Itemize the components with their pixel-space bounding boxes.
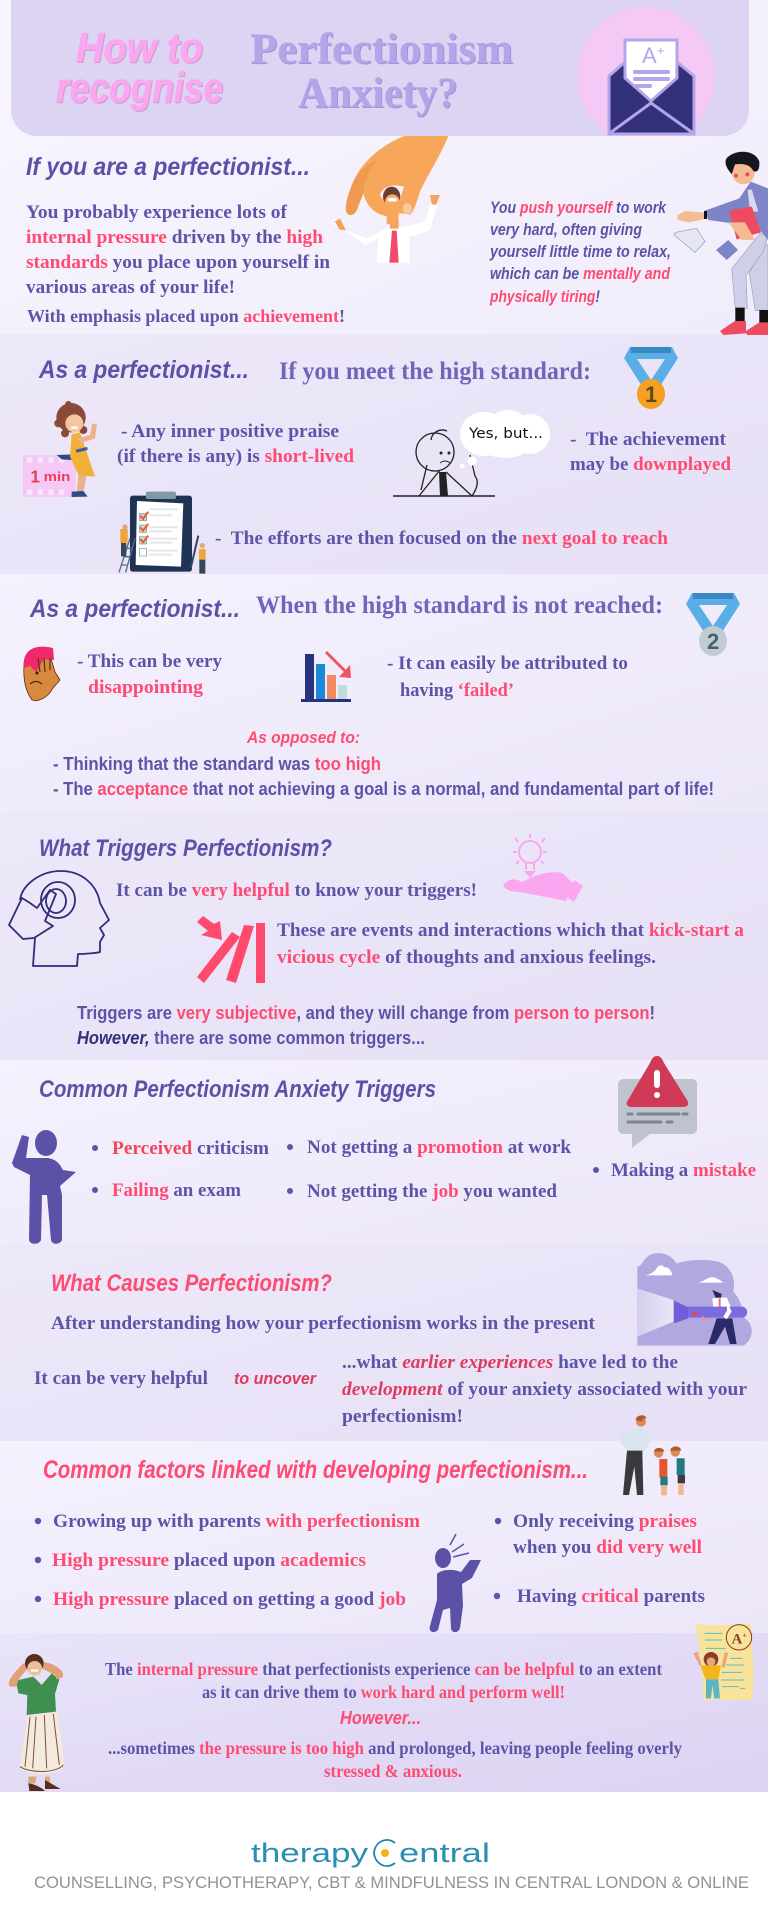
bullet list: left: Growing up with parents with perfectionism: [53, 1512, 421, 1532]
icon: stressed man dropping papers: [674, 152, 768, 335]
heading: Common Perfectionism Anxiety Triggers: [39, 1076, 436, 1103]
panel: common perfectionism anxiety triggers: [12, 1056, 756, 1244]
text block: push yourself: very hard, often giving: [490, 220, 643, 239]
text block: internal pressure: standards you place upon yourself in: [26, 253, 331, 273]
icon: envelope with A+ paper: +: [657, 43, 665, 58]
text block: pressure too high: stressed & anxious.: [324, 1761, 462, 1781]
text block: downplayed: - The achievement: [570, 430, 727, 450]
icon: silver medal: 2: [707, 629, 719, 654]
text block: push yourself: which can be mentally and: [490, 264, 671, 283]
bullet list: left: High pressure placed on getting a good job: [53, 1590, 406, 1610]
text block: opposed list: [53, 754, 714, 799]
text block: disappointing: - This can be very: [77, 652, 223, 672]
title: how to recognise: [56, 24, 223, 111]
text block: internal pressure: With emphasis placed upon achievement!: [27, 306, 345, 326]
footer: tagline: COUNSELLING, PSYCHOTHERAPY, CBT & MINDFULNESS IN CENTRAL LONDON & ONLINE: [34, 1873, 749, 1892]
text block: next goal: - The efforts are then focused on the next goal to reach: [215, 529, 669, 549]
heading: What Causes Perfectionism?: [51, 1270, 332, 1297]
text block: push yourself: [489, 198, 671, 306]
subheading: however: However...: [340, 1708, 421, 1728]
title: how to recognise: How to: [76, 24, 203, 71]
footer: therapy central logo: [251, 1838, 490, 1868]
panel: what triggers perfectionism: [9, 834, 744, 1048]
subheading: as opposed to: As opposed to:: [246, 728, 360, 747]
text block: failed: having ‘failed’: [400, 681, 514, 701]
panel: common factors background: [0, 1441, 768, 1633]
icon: clipboard checklist: [119, 492, 206, 574]
text block: pressure too high: [108, 1738, 682, 1781]
text block: failed: - It can easily be attributed to: [387, 654, 628, 674]
icon: anxious woman holding head: [9, 1654, 64, 1791]
text block: opposed list: - Thinking that the standard was too high: [53, 754, 381, 774]
icon: falling bar chart: [301, 652, 351, 702]
text block: disappointing: [77, 652, 223, 698]
text block: to uncover: to uncover: [234, 1369, 317, 1388]
icon: girl on one minute film: [23, 401, 97, 497]
panel: footer background: [0, 1792, 768, 1920]
icon: A plus paper with happy girl: [693, 1623, 754, 1700]
callout: yes but thought cloud: [460, 410, 550, 468]
heading: as a perfectionist: As a perfectionist...: [38, 356, 249, 384]
panel: if you meet the high standard: [23, 347, 732, 574]
icon: A plus paper with happy girl: +: [742, 1630, 747, 1639]
callout: yes but thought cloud: Yes, but...: [468, 426, 543, 442]
icon: disappointed face: [24, 647, 60, 700]
text block: internal pressure: various areas of your life!: [26, 278, 235, 298]
heading: not reached: When the high standard is not reached:: [256, 592, 663, 619]
text block: after understanding: After understanding how your perfectionism works in the present: [51, 1314, 596, 1334]
icon: father and two sons: [620, 1415, 685, 1495]
bullet list: right: [494, 1512, 705, 1607]
icon: hand pinching man: [334, 136, 448, 263]
text block: push yourself: You push yourself to work: [490, 198, 667, 217]
icon: head with finger press: [9, 871, 109, 966]
text block: internal pressure helpful: as it can drive them to work hard and perform well!: [202, 1682, 565, 1702]
text block: downplayed: may be downplayed: [570, 455, 732, 475]
icon: gold medal: [624, 347, 678, 409]
text block: internal pressure helpful: [105, 1659, 662, 1702]
icon: warning message: [618, 1056, 697, 1148]
panel: when the high standard is not reached: [24, 592, 740, 799]
bullet list: column two: Not getting the job you wanted: [307, 1182, 558, 1202]
panel: common factors linked: [35, 1415, 705, 1632]
icon: falling dominoes: [197, 916, 265, 983]
title: perfectionism anxiety: Anxiety?: [298, 70, 458, 117]
text block: internal pressure: [26, 203, 345, 326]
bullet list: column two: Not getting a promotion at work: [307, 1138, 572, 1158]
text block: internal pressure: You probably experience lots of: [26, 203, 288, 223]
text block: subjective triggers: Triggers are very subjective, and they will change from person to person!: [77, 1003, 655, 1023]
icon: confused man: [12, 1130, 76, 1244]
text block: it can be very helpful: It can be very helpful: [34, 1369, 208, 1389]
icon: envelope with A+ paper: A: [642, 43, 657, 68]
panel: intro background: [0, 0, 768, 334]
heading: meet the high standard: If you meet the high standard:: [279, 358, 591, 385]
text block: helpful to know: It can be very helpful to know your triggers!: [116, 881, 477, 901]
text block: subjective triggers: However, there are some common triggers...: [77, 1028, 425, 1048]
text block: earlier experiences: ...what earlier experiences have led to the: [342, 1353, 678, 1373]
icon: girl on one minute film: min: [44, 470, 70, 484]
icon: shouting man: [430, 1534, 481, 1632]
bullet list: column one: Perceived criticism: [112, 1139, 270, 1159]
bullet list: column two: [287, 1138, 572, 1202]
panel: causes background: [0, 1244, 768, 1441]
panel: header banner: [11, 0, 749, 145]
icon: A plus paper with happy girl: A: [732, 1631, 743, 1647]
icon: bulb over hand: [503, 834, 583, 902]
text block: internal pressure helpful: The internal pressure that perfectionists experience can be helpful to an extent: [105, 1659, 662, 1679]
footer: therapy central logo: entral: [399, 1838, 490, 1868]
text block: pressure too high: ...sometimes the pressure is too high and prolonged, leaving people feeling overly: [108, 1738, 682, 1758]
bullet list: right: when you did very well: [513, 1538, 702, 1558]
bullet list: right: Only receiving praises: [513, 1512, 697, 1532]
text block: earlier experiences: [342, 1353, 747, 1427]
bullet list: column one: [92, 1139, 270, 1201]
panel: conclusion: [9, 1623, 754, 1791]
text block: short-lived praise: [117, 422, 355, 467]
icon: stick man thinking: [393, 430, 495, 496]
heading: If you are a perfectionist...: [26, 153, 310, 181]
text block: internal pressure: internal pressure driven by the high: [26, 228, 324, 248]
icon: envelope with A+ paper: [577, 7, 715, 145]
text block: vicious cycle: [277, 921, 744, 968]
bullet: making a mistake: Making a mistake: [611, 1161, 756, 1181]
panel: not reached background: [0, 574, 768, 812]
bullet list: left: High pressure placed upon academics: [52, 1551, 366, 1571]
icon: gold medal: 1: [645, 382, 657, 407]
heading: as a perfectionist: As a perfectionist...: [29, 595, 240, 623]
bullet list: right: Having critical parents: [517, 1587, 705, 1607]
panel: if you are a perfectionist: [26, 136, 768, 335]
bullet list: column one: Failing an exam: [112, 1181, 242, 1201]
text block: vicious cycle: vicious cycle of thoughts and anxious feelings.: [277, 948, 656, 968]
text block: short-lived praise: - Any inner positive praise: [121, 422, 339, 442]
title: perfectionism anxiety: [250, 26, 513, 117]
icon: girl on one minute film: 1: [30, 466, 40, 486]
panel: met standard background: [0, 334, 768, 574]
text block: disappointing: disappointing: [88, 678, 204, 698]
panel: conclusion background: [0, 1633, 768, 1792]
text block: earlier experiences: perfectionism!: [342, 1407, 463, 1427]
text block: earlier experiences: development of your anxiety associated with your: [342, 1380, 747, 1400]
text block: vicious cycle: These are events and interactions which that kick-start a: [277, 921, 744, 941]
heading: What Triggers Perfectionism?: [39, 835, 332, 862]
bullet list: left: [35, 1512, 421, 1610]
icon: man with flashlight: [637, 1253, 752, 1346]
panel: triggers background: [0, 812, 768, 1060]
text block: opposed list: - The acceptance that not achieving a goal is a normal, and fundamental part of life!: [53, 779, 714, 799]
icon: silver medal: [686, 593, 740, 656]
text block: short-lived praise: (if there is any) is short-lived: [117, 447, 355, 467]
text block: subjective triggers: [77, 1003, 655, 1048]
text block: downplayed: [570, 430, 732, 475]
title: perfectionism anxiety: Perfectionism: [250, 26, 513, 73]
footer: therapy central logo: therapy: [251, 1838, 369, 1868]
text block: push yourself: physically tiring!: [489, 287, 600, 306]
panel: common triggers background: [0, 1060, 768, 1244]
heading: Common factors linked with developing perfectionism...: [43, 1456, 588, 1484]
text block: failed: [387, 654, 628, 701]
panel: what causes perfectionism: [34, 1253, 752, 1427]
text block: push yourself: yourself little time to relax,: [489, 242, 671, 261]
title: how to recognise: recognise: [56, 64, 223, 111]
